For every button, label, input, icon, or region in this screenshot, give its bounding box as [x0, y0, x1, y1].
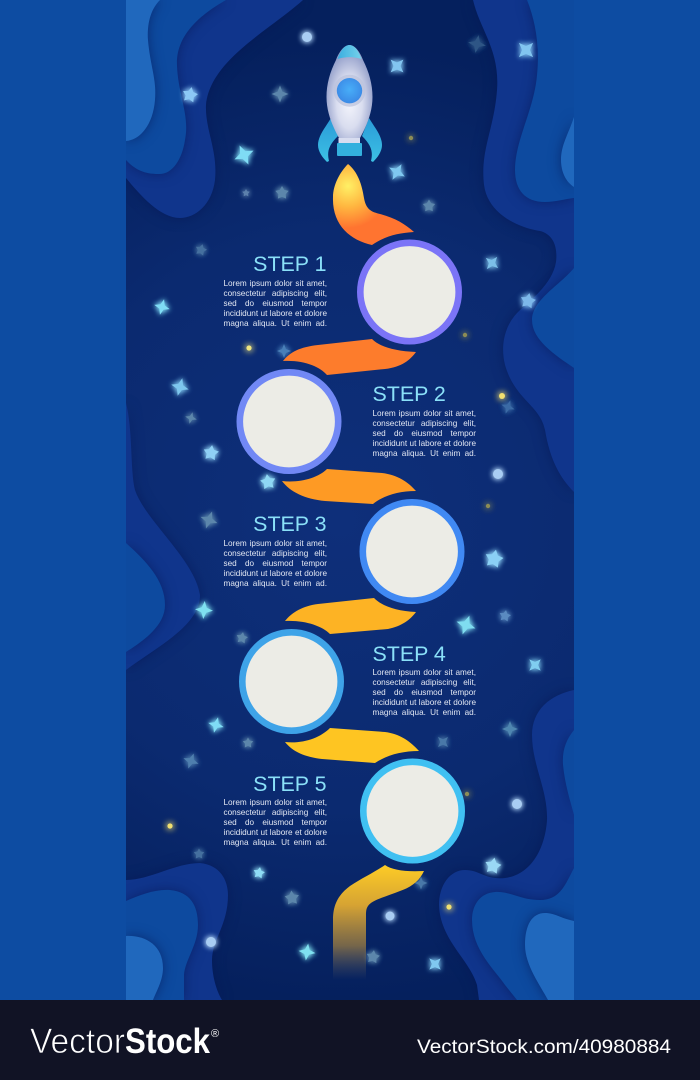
step 4 text: consectetur adipiscing elit, — [372, 678, 476, 687]
paper layers: top left — [126, 0, 303, 218]
ribbon 1 — [283, 339, 416, 375]
step 3 circle — [363, 502, 461, 601]
paper layers: top right — [473, 0, 574, 492]
step 4 text — [372, 642, 476, 717]
step 2 text: consectetur adipiscing elit, — [372, 419, 476, 428]
step 1 text — [224, 252, 327, 328]
step 2 text — [372, 382, 476, 458]
step 3 text: magna aliqua. Ut enim ad. — [224, 579, 327, 588]
step 3 text — [224, 512, 327, 588]
step 2 text: magna aliqua. Ut enim ad. — [372, 449, 476, 458]
step 2 circle — [240, 372, 338, 471]
step 4 text: incididunt ut labore et dolore — [372, 698, 476, 707]
paper layers: middle left — [126, 403, 200, 670]
step 5 text: consectetur adipiscing elit, — [224, 808, 327, 817]
footer logo: ® — [211, 1028, 219, 1040]
step 4 circle — [242, 632, 341, 731]
footer logo — [30, 1022, 219, 1061]
step 5 text: STEP 5 — [253, 772, 326, 796]
ribbon 2 — [282, 469, 416, 504]
small yellow lights — [167, 136, 505, 910]
step 5 text — [224, 772, 327, 847]
step 5 circle — [363, 762, 462, 860]
step 3 text: incididunt ut labore et dolore — [224, 569, 327, 578]
step 5 text: sed do eiusmod tempor — [224, 818, 327, 827]
step 1 circle — [360, 243, 459, 341]
step 1 text: STEP 1 — [253, 252, 326, 276]
paper layers: bottom left — [126, 863, 228, 1000]
step 5 text: magna aliqua. Ut enim ad. — [224, 838, 327, 847]
ribbon 4 — [285, 728, 419, 763]
step 4 text: Lorem ipsum dolor sit amet, — [372, 668, 476, 677]
step 2 text: sed do eiusmod tempor — [372, 429, 476, 438]
step 3 text: STEP 3 — [253, 512, 326, 536]
step 2 text: STEP 2 — [372, 382, 446, 406]
step 4 text: sed do eiusmod tempor — [372, 688, 476, 697]
step 1 text: sed do eiusmod tempor — [224, 299, 327, 308]
step 4 text: magna aliqua. Ut enim ad. — [372, 708, 476, 717]
step 4 text: STEP 4 — [372, 642, 446, 666]
step 2 text: incididunt ut labore et dolore — [372, 439, 476, 448]
footer id: VectorStock.com/40980884 — [417, 1036, 671, 1058]
glowing dots — [206, 32, 522, 947]
step 1 text: Lorem ipsum dolor sit amet, — [224, 279, 327, 288]
footer logo: Stock — [125, 1022, 210, 1061]
step 1 text: consectetur adipiscing elit, — [224, 289, 327, 298]
step 1 text: incididunt ut labore et dolore — [224, 309, 327, 318]
step 5 text: Lorem ipsum dolor sit amet, — [224, 798, 327, 807]
step 3 text: Lorem ipsum dolor sit amet, — [224, 539, 327, 548]
rocket — [318, 45, 382, 162]
ribbon 3 — [285, 598, 416, 634]
footer bar — [0, 1000, 700, 1080]
paper cut layers — [126, 0, 574, 1000]
stars — [152, 34, 546, 975]
night sky panel — [126, 0, 574, 1000]
step 3 text: sed do eiusmod tempor — [224, 559, 327, 568]
step 2 text: Lorem ipsum dolor sit amet, — [372, 409, 476, 418]
step 3 text: consectetur adipiscing elit, — [224, 549, 327, 558]
paper layers: bottom right — [439, 690, 574, 1000]
footer logo: Vector — [30, 1022, 125, 1061]
ribbon 5 fading tail — [333, 865, 424, 980]
step 1 text: magna aliqua. Ut enim ad. — [224, 319, 327, 328]
step 5 text: incididunt ut labore et dolore — [224, 828, 327, 837]
flame — [333, 164, 414, 245]
